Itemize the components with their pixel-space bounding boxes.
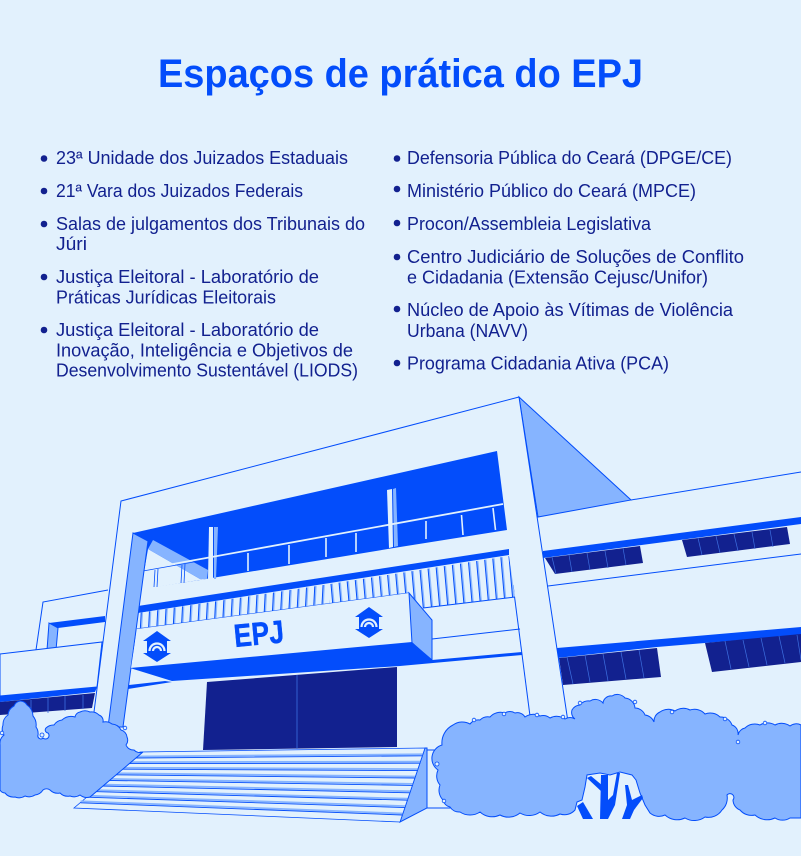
item: Laboratório de Práticas [41, 267, 319, 308]
sign underside [130, 642, 522, 681]
sign [128, 593, 522, 689]
louvers [137, 556, 515, 629]
right wing [519, 397, 801, 685]
item: 23ª Unidade: 23ª Unidade dos Juizados Estaduais [56, 148, 348, 168]
sign side [409, 593, 432, 660]
list: right column [394, 148, 744, 374]
item: Cejusc: Centro Judiciário de Soluções de Conflito [407, 247, 744, 267]
item: Defensoria: Defensoria Pública do Ceará (DPGE/CE) [407, 148, 732, 168]
item: LIODS: Desenvolvimento Sustentável (LIODS) [56, 360, 358, 380]
bush buds [0, 700, 767, 803]
item: LIODS: Justiça Eleitoral - Laboratório de [56, 320, 319, 340]
item: Laboratório de Práticas: Justiça Eleitoral - Laboratório de [56, 267, 319, 287]
title: Espaços de prática do EPJ [158, 52, 643, 96]
item: Ministério Público: Ministério Público do Ceará (MPCE) [407, 181, 696, 201]
pillar side [108, 533, 148, 727]
item: 21ª Vara: 21ª Vara dos Juizados Federais [56, 181, 303, 201]
icon: logo right [355, 607, 383, 638]
item: NAVV: Núcleo de Apoio às Vítimas de Violência [407, 300, 734, 320]
balustrade [143, 504, 503, 587]
item: Cejusc: e Cidadania (Extensão Cejusc/Unifor) [407, 268, 708, 288]
bush: left [0, 701, 143, 798]
upper windows [545, 527, 790, 574]
item: Cejusc [394, 247, 744, 288]
door [203, 667, 397, 750]
item: Salas de julgamentos: Salas de julgamentos dos Tribunais do [56, 214, 365, 234]
item: Salas de julgamentos: Júri [56, 234, 87, 254]
left wing [0, 590, 108, 715]
item: Laboratório de Práticas: Práticas Jurídicas Eleitorais [56, 288, 276, 308]
stairs [74, 748, 460, 822]
item: PCA: Programa Cidadania Ativa (PCA) [407, 354, 669, 374]
interior columns [208, 488, 398, 579]
dark opening [133, 451, 507, 589]
lower windows [559, 634, 801, 685]
item: NAVV: Urbana (NAVV) [407, 321, 528, 341]
bush: right [432, 694, 801, 821]
item: Procon: Procon/Assembleia Legislativa [407, 214, 652, 234]
item: NAVV [394, 300, 734, 341]
item: LIODS: Inovação, Inteligência e Objetivos de [56, 340, 353, 360]
parapet stripe [138, 549, 509, 613]
item: Salas de julgamentos [41, 214, 365, 254]
sign label: EPJ [232, 613, 285, 654]
list: left column [41, 148, 365, 380]
front frame [93, 397, 568, 727]
diagonal beam [148, 540, 208, 579]
icon: logo left [143, 631, 171, 662]
tree trunks [577, 773, 643, 819]
building illustration [0, 397, 801, 822]
roof triangle [519, 397, 631, 517]
item: LIODS [41, 320, 358, 380]
